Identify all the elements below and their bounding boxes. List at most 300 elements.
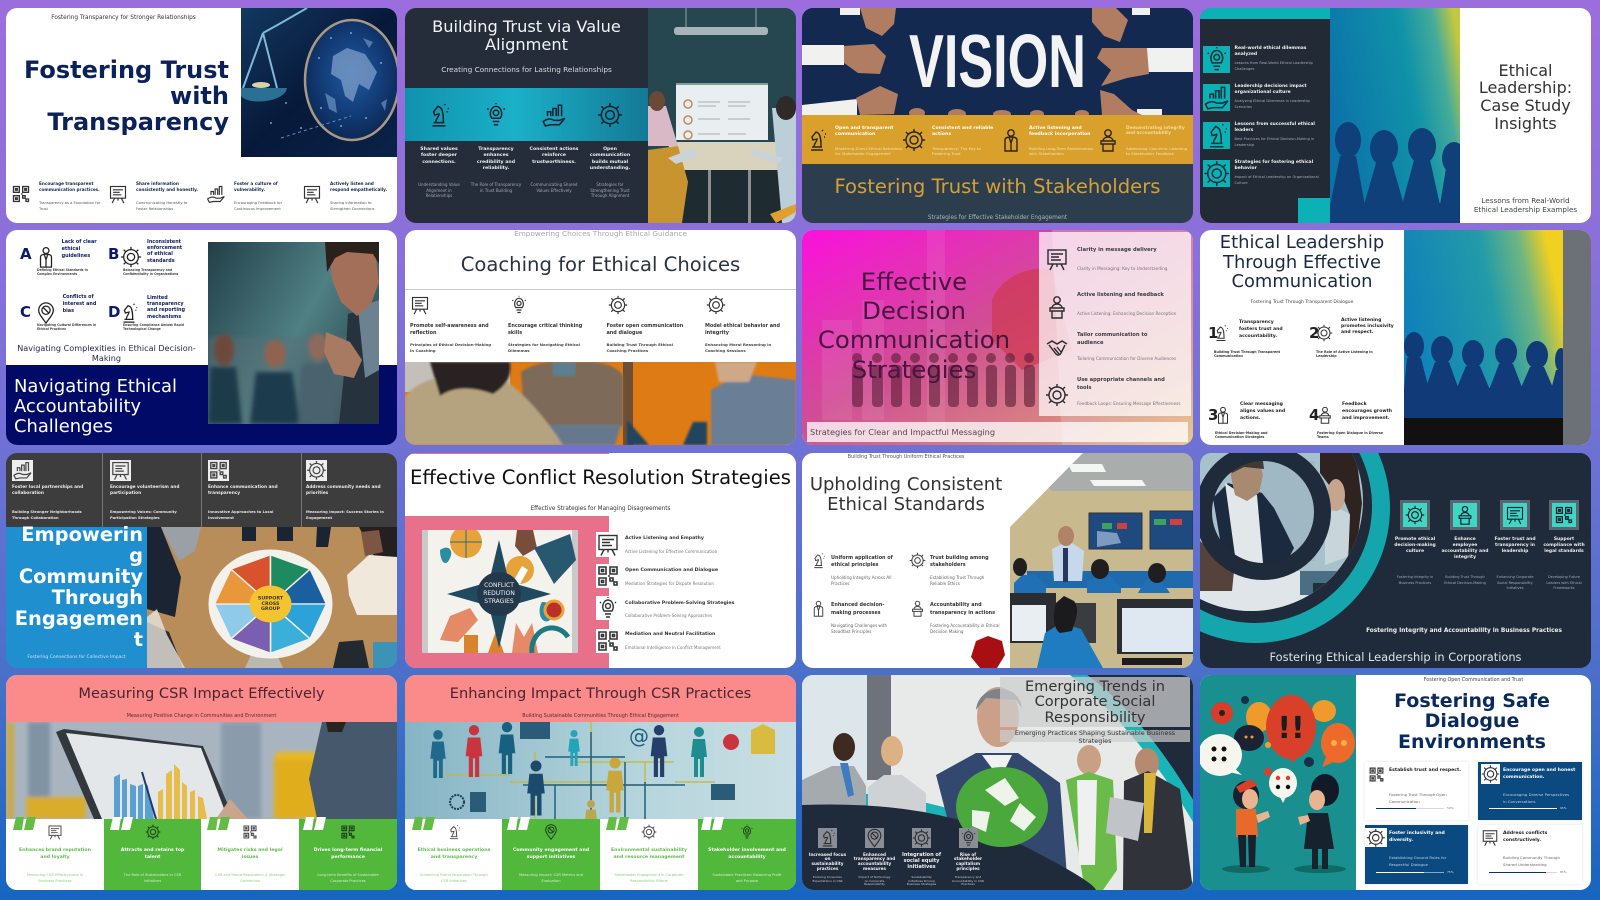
icon: watch: [120, 246, 142, 268]
item: accountability: accountability and: [1441, 549, 1489, 554]
item 1: Communication: [1214, 354, 1243, 358]
item: tailor: Tailoring Communication for Diverse Audiences: [1077, 356, 1176, 361]
item: listen actively: [304, 181, 387, 211]
title: [1000, 678, 1190, 726]
item: risks: Connection: [240, 879, 260, 883]
item 3: Ethical Decision-Making and: [1215, 430, 1268, 434]
item: shared values: Relationships: [426, 193, 452, 198]
item: lessons: Leadership: [1234, 143, 1254, 147]
subtitle: Fostering Transparency for Stronger Relationships: [51, 15, 196, 21]
item: transparent communication: [12, 181, 100, 211]
item: reputation: Business Practices: [38, 879, 72, 883]
divider: [201, 453, 202, 527]
item: decision making: making processes: [831, 610, 881, 616]
icon: network: [12, 186, 30, 202]
item: accountability: employee: [1453, 543, 1477, 548]
icon: quote mark: [207, 817, 230, 830]
icon: bulb: [509, 295, 529, 315]
icon: bulb gear: [903, 129, 925, 151]
image: conflict resolution poster: REDUTION: [483, 590, 515, 597]
pink panel: [405, 516, 609, 668]
icon: quote mark: [606, 817, 629, 830]
image: conflict resolution poster: STRAGIES: [484, 598, 514, 605]
title: [6, 524, 143, 650]
item: self-awareness: Promote self-awareness and: [410, 322, 489, 328]
panel: Fostering Ethical Leadership in Corporations: [1200, 453, 1591, 668]
icon: laptop: [410, 295, 430, 315]
icon: quote mark: [13, 817, 36, 830]
icon: gear tile: [1202, 160, 1230, 187]
item: partnerships: collaboration: [12, 491, 44, 496]
title: Responsibility: [1045, 709, 1145, 726]
item: critical thinking: skills: [508, 330, 522, 336]
image: conflict resolution poster: [422, 530, 578, 653]
image: silhouettes with yellow gradient: [1404, 230, 1591, 445]
item: model behavior: Coaching Sessions: [705, 348, 746, 353]
icon: person: [40, 247, 52, 268]
item A: Defining Ethical Standards in: [37, 268, 88, 272]
item: environment: Stakeholder Engagement in Corporate: [614, 873, 684, 877]
item: trust: Enhancing Corporate: [1497, 575, 1533, 579]
item: active listening: [596, 532, 791, 557]
item: compliance: [1540, 500, 1588, 595]
item: volunteerism: Encourage volunteerism and: [110, 485, 179, 490]
item: accountability: Fostering Accountability in Ethical: [930, 623, 1000, 628]
panel: Fostering Trust with Transparency: [6, 8, 397, 223]
item: trust: [1491, 500, 1539, 595]
item: share information: Foster Relationships: [136, 207, 173, 211]
item: open communication: Open Communication and Dialogue: [625, 568, 718, 573]
pink header: [6, 675, 397, 722]
item: share information: [110, 181, 198, 211]
title: Through Effective: [1223, 252, 1381, 273]
icon: bulb tile: [1202, 46, 1230, 73]
item: active listening: Building Long-Term Relationships: [1029, 146, 1093, 150]
item: model behavior: Model ethical behavior and: [705, 322, 780, 328]
item C: Ethical Practices: [37, 327, 66, 331]
item: tailor: audience: [1077, 340, 1104, 346]
item: listen actively: Sharing Information to: [330, 201, 372, 205]
card: trust and respect: Establish trust and respect.: [1389, 768, 1461, 772]
item: sustainability: practices: [817, 866, 838, 871]
panel: Fostering Trust with Stakeholders: [802, 8, 1193, 223]
item: risks: [201, 819, 299, 890]
item 1: 1: [1208, 324, 1218, 342]
item 3: aligns values and: [1240, 408, 1285, 414]
icon: device: [47, 824, 63, 840]
item: operations: [405, 819, 503, 890]
item: stakeholder capitalism: principles: [956, 866, 980, 871]
item: reputation: Enhances brand reputation: [19, 848, 91, 852]
card: open communication: Encourage open and honest: [1503, 768, 1575, 772]
card: open communication: Encouraging Diverse Perspectives: [1503, 792, 1569, 796]
icon: knight: [811, 130, 826, 151]
item: trust: transparency in: [1495, 543, 1535, 548]
title: Decision: [862, 296, 966, 325]
item: open communication: Strategies for: [596, 182, 624, 187]
item: risks: issues: [242, 854, 258, 860]
item: transparency: on Corporate: [865, 879, 884, 883]
item 4: Feedback: [1342, 402, 1367, 406]
icon: person: [810, 600, 827, 617]
title: [1200, 233, 1404, 291]
panel: Ethical Leadership Through Effective Communication: [1200, 230, 1591, 445]
title: Challenges: [14, 416, 113, 437]
panel: Effective Decision Communication Strategies: [802, 230, 1193, 445]
icon: handshake: [1045, 336, 1069, 360]
item: transparency: credibility and: [477, 160, 515, 165]
image: support circle group: GROUP: [261, 606, 281, 612]
item: environment: and resource management: [614, 854, 684, 860]
item: partnerships: Foster local partnerships and: [12, 485, 83, 490]
item: needs: Engagement: [306, 516, 332, 520]
item: environment: Responsibility Efforts: [630, 879, 668, 883]
item: shared values: Understanding Value: [418, 182, 460, 187]
image: children with speech bubbles: !!: [1277, 711, 1305, 746]
item: active listening: with Stakeholders: [1029, 150, 1064, 156]
item: volunteerism: participation: [110, 491, 141, 496]
title: Ethical: [1498, 60, 1552, 80]
item: volunteerism: Participation Strategies: [110, 516, 160, 520]
item: reputation: and loyalty: [40, 854, 70, 860]
item: clarity: Clarity in message delivery: [1077, 247, 1157, 253]
item: open dialogue: [606, 294, 698, 354]
title: Emerging Trends in: [1025, 678, 1165, 694]
item: model behavior: Enhancing Moral Reasoning in: [705, 342, 771, 347]
pink header: [405, 675, 796, 722]
item: tailor: [1045, 330, 1187, 366]
item: risks: CSR and Brand Reputation: A Strategic: [215, 873, 285, 877]
item: compliance: Frameworks: [1553, 586, 1575, 590]
progress bar: [1488, 808, 1556, 809]
icon: teal tile: [1450, 500, 1480, 530]
item: operations: Enhancing Brand Reputation Through: [420, 873, 488, 877]
item: needs: Address community needs and: [306, 485, 381, 490]
item 2: 2: [1309, 324, 1319, 342]
item: trust building: Reliable Ethics: [930, 581, 960, 586]
subtitle: [1000, 729, 1190, 745]
title: Corporate Social: [1035, 693, 1155, 710]
item: transparency: Transparency: [478, 147, 514, 152]
panel: Coaching for Ethical Choices: [405, 230, 796, 445]
item: sustainability: Evolving Consumer: [813, 875, 842, 879]
item: accountability: Enhance: [1454, 537, 1476, 542]
item: stakeholders: [698, 819, 796, 890]
item: critical thinking: Strategies for Navigating Ethical: [508, 342, 580, 347]
title: Ethical Leadership: [1220, 232, 1384, 253]
item: open dialogue: Coaching Practices: [606, 348, 648, 353]
icon: map pin: [35, 302, 57, 324]
title: Through: [52, 586, 143, 608]
item: transparency: Responsibility: [864, 882, 885, 886]
item D: transparency: [147, 301, 184, 307]
item: shared values: [418, 104, 460, 198]
icon: red polygon accent: [970, 636, 1006, 668]
card: address conflicts: Address conflicts: [1503, 830, 1547, 836]
card: open communication: [1478, 762, 1582, 820]
letter D: D: [108, 303, 120, 321]
icon: tile: [306, 460, 327, 480]
image: support circle group: [147, 527, 397, 668]
image: corporate figures in circular frame: [1200, 453, 1390, 643]
item: model behavior: integrity: [705, 330, 729, 336]
icon: growth chart: [542, 104, 566, 127]
item: operations: and transparency: [431, 854, 477, 860]
item 2: The Role of Active Listening in: [1316, 350, 1373, 354]
item: ethical culture: decision-making: [1394, 543, 1436, 548]
item: performance: performance: [331, 854, 365, 860]
letter B: B: [108, 245, 119, 263]
item: open communication: communication: [590, 153, 630, 158]
item: open communication: [590, 103, 630, 198]
item: open dialogue: Building Trust Through Ethical: [606, 342, 673, 347]
item 4: encourages growth: [1342, 408, 1392, 414]
item: active listening: Active Listening and Empathy: [625, 536, 704, 541]
item: open communication: Mastering Direct Ethical Behaviors: [835, 146, 902, 150]
item D: and reporting: [147, 307, 185, 313]
item 2: Active listening: [1341, 318, 1381, 323]
item: reputation: [6, 819, 104, 890]
item: risks: Mitigates risks and legal: [217, 848, 283, 852]
item: open communication: builds mutual: [592, 160, 628, 165]
item: share information: Communicating Honestly to: [136, 201, 187, 205]
item A: Lack of clear: [62, 238, 97, 244]
image: vision table with fists: VISION: [909, 19, 1086, 103]
item: communication: transparency: [208, 491, 240, 496]
item: transparency: in Trust Building: [480, 188, 512, 193]
subtitle: Lessons from Real-World: [1481, 196, 1570, 204]
subtitle: Measuring Positive Change in Communities and Environment: [127, 713, 276, 719]
item C: bias: [63, 308, 74, 314]
title: Coaching for Ethical Choices: [461, 252, 740, 276]
icon: pin: [543, 824, 559, 840]
subtitle: Effective Strategies for Managing Disagreements: [531, 506, 670, 512]
item: strategies: Impact of Ethical Leadership on Organizational: [1234, 175, 1319, 179]
item: active listening: [1004, 126, 1093, 156]
item: operations: CSR Initiatives: [441, 879, 467, 883]
subtitle: Building Sustainable Communities Through Ethical Engagement: [522, 713, 679, 719]
icon: gears: [608, 295, 628, 315]
item: sustainability: Expectations in CSR: [812, 879, 843, 883]
item 2: Leadership: [1316, 354, 1337, 358]
item: channels: tools: [1077, 385, 1091, 391]
item: ethical culture: culture: [1406, 549, 1424, 554]
item: stakeholder capitalism: Transparency and: [955, 875, 981, 879]
item: trust building: stakeholders: [930, 562, 966, 568]
subtitle strip: [1000, 730, 1190, 742]
item: trust: leadership: [1502, 549, 1528, 554]
item D: Limited: [147, 295, 168, 301]
title: Empowerin: [21, 522, 143, 546]
item: performance: Corporate Practices: [330, 879, 366, 883]
progress bar: [1488, 872, 1556, 873]
item 4: 4: [1309, 406, 1319, 424]
card: open communication: 95%: [1560, 806, 1567, 810]
item 2: promotes inclusivity: [1341, 324, 1394, 329]
item: environment: Environmental sustainability: [611, 848, 687, 852]
icon: presentation board: [304, 186, 320, 204]
item: sustainability: Increased focus: [809, 852, 846, 857]
icon: tile: [958, 828, 978, 848]
icon: hexagon gear: [706, 295, 726, 315]
item: open communication: Mediation Strategies for Dispute Resolution: [625, 581, 714, 586]
title: stakeholders: Fostering Trust with Stakeholders: [834, 175, 1160, 198]
subtitle: Fostering Open Communication and Trust: [1424, 678, 1523, 683]
title: Strategies: [852, 355, 976, 384]
item: consistent actions: Values Effectively: [536, 188, 572, 193]
item: stakeholder capitalism: [945, 828, 991, 890]
item: accountability: integrity: [1454, 555, 1476, 560]
image: magenta overlay: [802, 230, 1193, 445]
item: sustainability: [804, 828, 850, 890]
divider line: [405, 289, 796, 290]
card: address conflicts: 85%: [1560, 870, 1567, 874]
icon: tile: [12, 460, 33, 480]
item: lessons: leaders: [1234, 128, 1253, 133]
divider: [102, 453, 103, 527]
item: consistent actions: Consistent and reliable: [932, 126, 993, 131]
item 3: Communication Strategies: [1215, 435, 1264, 439]
icon: knight: [118, 302, 140, 324]
item: compliance: Developing Future: [1548, 575, 1580, 579]
item: lessons: Lessons from successful ethical: [1234, 122, 1315, 127]
icon: bulb tile: [596, 596, 620, 620]
panel: Fostering Safe Dialogue Environments: [1200, 675, 1591, 890]
item: dilemmas: Challenges: [1234, 67, 1254, 71]
item: integrity: and accountability: [1126, 131, 1171, 136]
item: open communication: Open: [603, 147, 617, 152]
item: social equity: Business Strategies: [907, 882, 936, 886]
item: partnerships: Building Stronger Neighborhoods: [12, 510, 82, 514]
item: compliance: Leaders with Ethical: [1546, 581, 1582, 585]
item: ethical culture: Promote ethical: [1395, 537, 1435, 542]
item: uniform application: Practices: [831, 581, 849, 586]
card: address conflicts: constructively.: [1503, 838, 1541, 842]
item: transparency: transparency and: [854, 856, 895, 861]
item: strategies: [1203, 160, 1319, 187]
item: integrity: to Stakeholder Feedback: [1126, 150, 1174, 156]
item: dilemmas: Real-world ethical dilemmas: [1234, 46, 1306, 51]
icon: trophy: [739, 824, 755, 840]
item: active listening: Active listening and feedback: [1077, 292, 1164, 298]
title: Leadership:: [1479, 78, 1572, 97]
item C: interest and: [63, 301, 96, 307]
title: Engagemen: [15, 606, 143, 630]
panel: Empowering Community Through Engagement: [6, 453, 397, 668]
orange band: [802, 115, 1193, 164]
title backing: [1000, 677, 1190, 727]
item: stakeholder capitalism: Accountability in CSR: [952, 879, 984, 883]
item: integrity: Addressing Concerns: Listening: [1126, 146, 1187, 150]
item: trust: Foster trust and: [1494, 537, 1536, 542]
title: with: [170, 82, 229, 110]
item: stakeholders: and Purpose: [736, 879, 758, 883]
item: community: Community engagement and: [513, 848, 589, 852]
title: Enhancing Impact Through CSR Practices: [450, 685, 751, 702]
icon: teal tile: [1549, 500, 1579, 530]
item: open communication: for Stakeholder Engagement: [835, 150, 891, 156]
item: transparency: measures: [863, 866, 886, 871]
title: Navigating Ethical: [14, 376, 177, 397]
item: shared values: Shared values: [420, 147, 458, 152]
item A: guidelines: [62, 252, 90, 258]
subtitle: Building Trust Through Uniform Ethical Practices: [848, 454, 964, 460]
icon: bulb gear: [486, 103, 506, 126]
item: trust: Social Responsibility: [1497, 581, 1533, 585]
teal band: [405, 88, 648, 141]
subtitle: [1474, 196, 1577, 214]
item: open dialogue: Foster open communication: [606, 322, 683, 328]
item: consistent actions: Communicating Shared: [530, 182, 577, 187]
item: open communication: understanding.: [590, 166, 630, 171]
icon: quote mark: [412, 817, 435, 830]
icon: tile: [208, 460, 229, 480]
item: active listening: feedback incorporation: [1029, 132, 1091, 137]
card: address conflicts: [1478, 825, 1582, 884]
item: stakeholders: Stakeholder involvement and: [708, 848, 786, 852]
card: open communication: in Conversations: [1503, 798, 1536, 804]
panel: Measuring CSR Impact Effectively: [6, 675, 397, 890]
right translucent panel: [1039, 232, 1191, 416]
item: compliance: Support: [1554, 537, 1574, 542]
item: listen actively: Strengthen Connections: [330, 207, 375, 211]
icon: podium: [909, 600, 926, 617]
item: accountability: [909, 600, 1004, 638]
title: Measuring CSR Impact Effectively: [78, 685, 325, 702]
top dark band: [6, 453, 397, 527]
subtitle: Creating Connections for Lasting Relationships: [441, 65, 612, 74]
icon: grid: [242, 824, 258, 840]
item: uniform application: ethical principles: [831, 562, 878, 568]
item: shared values: Alignment in: [426, 188, 452, 193]
item: consistent actions: Fostering Trust: [932, 150, 961, 156]
item: self-awareness: reflection: [410, 330, 436, 336]
item: tailor: Tailor communication to: [1077, 332, 1147, 338]
icon: knight: [446, 824, 462, 840]
image: meeting room: [648, 8, 796, 223]
item: active listening: Active Listening for Effective Communication: [625, 549, 717, 554]
item: performance: Drives long-term financial: [314, 848, 382, 852]
item: uniform application: Uniform application of: [831, 554, 893, 560]
item: culture: Leadership decisions impact: [1234, 84, 1307, 89]
item 1: fosters trust and: [1239, 326, 1283, 332]
card: inclusivity: Foster inclusivity and: [1389, 830, 1445, 836]
item: ethical culture: [1391, 500, 1439, 595]
subtitle: Fostering Connections for Collective Impact: [27, 655, 126, 660]
number and icon: [1212, 324, 1230, 342]
title: Effective: [861, 266, 967, 296]
item: culture of vulnerability: vulnerability.: [234, 187, 265, 192]
title: Ethical Standards: [827, 494, 985, 515]
image: support circle group: CROSS: [262, 601, 279, 607]
item 2: [1307, 318, 1399, 360]
image: call center training room: [1010, 453, 1193, 668]
item: trust building: [909, 552, 1004, 588]
item: talent: The Role of Stakeholders in CSR: [124, 873, 181, 877]
panel: Emerging Trends in Corporate Social Responsibility: [802, 675, 1193, 890]
card: inclusivity: Respectful Dialogue: [1389, 862, 1428, 866]
item 1: [1206, 318, 1298, 360]
item: culture: Scenarios: [1234, 105, 1252, 109]
item: trust building: Trust building among: [930, 554, 989, 560]
item 4: [1307, 400, 1399, 442]
item B: Confidentiality in Organizations: [123, 272, 178, 276]
item: accountability: transparency in actions: [930, 610, 995, 616]
image: conflict resolution poster: CONFLICT: [484, 582, 514, 589]
icon: device: [1480, 828, 1498, 847]
item: open dialogue: and dialogue: [606, 330, 642, 336]
item: consistent actions: Consistent actions: [530, 147, 578, 152]
